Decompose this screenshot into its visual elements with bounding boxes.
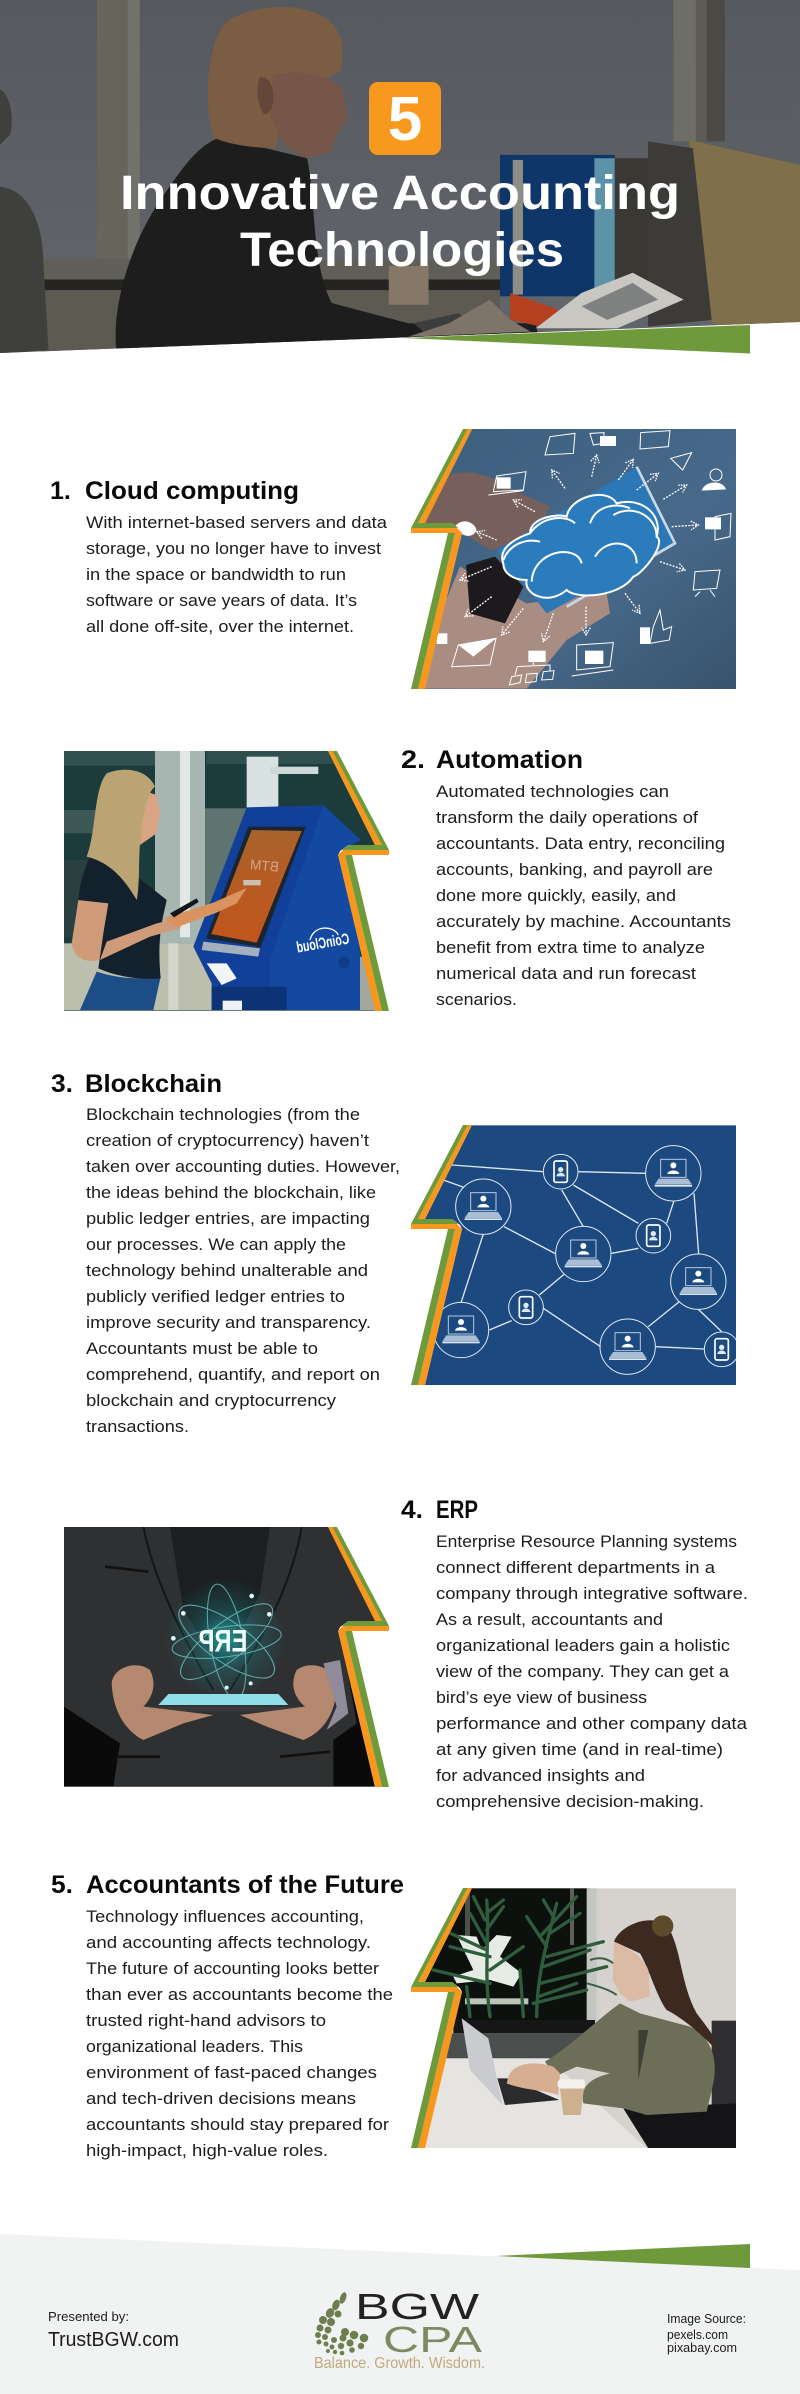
section 5: accountants of the future text: Technology influences accounting,: [86, 1907, 364, 1926]
section 2: automation text: Automated technologies can: [436, 782, 669, 801]
badge: number 5: [369, 82, 441, 155]
section 4 image: hands holding tablet with ERP hologram: [64, 1527, 391, 1787]
logo: BGW CPA: BGW: [355, 2286, 479, 2327]
section 4: ERP text: As a result, accountants and: [436, 1610, 663, 1629]
image source: pixabay.com: [667, 2340, 737, 2355]
image source: pexels.com: [667, 2327, 728, 2342]
badge: number 5: 5: [388, 85, 422, 154]
section 5: accountants of the future text: organizational leaders. This: [86, 2037, 303, 2056]
window light patches: [453, 1935, 522, 1987]
section 4: ERP text: at any given time (and in real-time): [436, 1740, 723, 1759]
section 4: ERP text: performance and other company data: [436, 1714, 748, 1733]
section 4: ERP text: for advanced insights and: [436, 1766, 645, 1785]
section 3: blockchain text: taken over accounting duties. However,: [86, 1157, 400, 1176]
accent frame image 5: [411, 1888, 472, 2148]
section 1 image: hands holding cloud phone: [410, 429, 737, 689]
woman body: [116, 137, 538, 350]
title: [120, 167, 680, 277]
hair: [614, 1920, 718, 2052]
section 1: cloud computing text: software or save years of data. It’s: [86, 591, 357, 610]
chair: [712, 2020, 736, 2104]
footer green wedge: [496, 2244, 750, 2268]
section 3: blockchain text: improve security and transparency.: [86, 1313, 371, 1332]
section 5: accountants of the future text: trusted right-hand advisors to: [86, 2011, 326, 2030]
desk items: [510, 293, 559, 327]
section 1: cloud computing text: [50, 477, 388, 636]
section 3: blockchain text: publicly verified ledger entries to: [86, 1287, 345, 1306]
footer panel: [0, 2234, 800, 2394]
section 3: blockchain text: the ideas behind the blockchain, like: [86, 1183, 376, 1202]
planter: [453, 2020, 595, 2033]
section 1: cloud computing text: 1.: [50, 477, 71, 505]
section 1: cloud computing text: Cloud computing: [85, 477, 299, 505]
window frame right: [673, 0, 696, 141]
section 2: automation text: Automation: [436, 746, 583, 774]
coffee cup: [560, 2088, 584, 2115]
plants: [433, 1897, 607, 2017]
section 4: ERP text: bird’s eye view of business: [436, 1688, 647, 1707]
blue binders: [500, 155, 615, 296]
section 5: accountants of the future text: [51, 1871, 404, 2160]
section 3: blockchain text: public ledger entries, are impacting: [86, 1209, 370, 1228]
laptop: [462, 2018, 503, 2105]
kiosk: [193, 805, 361, 1010]
section 3: blockchain text: technology behind unalterable and: [86, 1261, 368, 1280]
section 3: blockchain text: Blockchain technologies (from the: [86, 1105, 360, 1124]
section 5: accountants of the future text: Accountants of the Future: [86, 1871, 404, 1899]
section 1: cloud computing text: in the space or bandwidth to run: [86, 565, 346, 584]
section 4: ERP text: 4.: [401, 1496, 423, 1524]
section 4: ERP text: company through integrative software.: [436, 1584, 748, 1603]
table: [423, 2058, 647, 2148]
logo dot swirl: [315, 2291, 368, 2355]
section 2: automation text: accounts, banking, and payroll are: [436, 860, 713, 879]
image source: [667, 2311, 746, 2355]
section 5: accountants of the future text: and tech-driven decisions means: [86, 2089, 356, 2108]
section 5: accountants of the future text: The future of accounting looks better: [86, 1959, 379, 1978]
section 3: blockchain text: creation of cryptocurrency) haven’t: [86, 1131, 369, 1150]
face: [613, 1942, 650, 2002]
section 5: accountants of the future text: high-impact, high-value roles.: [86, 2141, 328, 2160]
section 3: blockchain text: our processes. We can apply the: [86, 1235, 346, 1254]
section 2: automation text: done more quickly, easily, and: [436, 886, 676, 905]
dark lower clothing: [623, 2103, 737, 2148]
lower wall: [41, 259, 500, 280]
title: Innovative Accounting: [120, 167, 680, 220]
logo: BGW CPA: Balance. Growth. Wisdom.: [314, 2355, 485, 2372]
section 4: ERP text: [401, 1496, 748, 1811]
section 1: cloud computing text: With internet-based servers and data: [86, 513, 388, 532]
office chair: [0, 187, 48, 354]
accent frame image 1: [411, 429, 472, 689]
section 2 image: woman at BTM kiosk: CoinCloud: [295, 931, 351, 957]
section 2 image: woman at BTM kiosk: [64, 751, 392, 1011]
section 3 image: network diagram: [410, 1125, 739, 1385]
section 4: ERP text: view of the company. They can get a: [436, 1662, 730, 1681]
hands: [507, 2063, 560, 2095]
section 3: blockchain text: comprehend, quantify, and report on: [86, 1365, 380, 1384]
presented by: Presented by:: [48, 2309, 129, 2324]
section 5: accountants of the future text: and accounting affects technology.: [86, 1933, 371, 1952]
accent frame image 4: [328, 1527, 389, 1787]
section 4 image: hands holding tablet with ERP hologram: ERP: [199, 1623, 247, 1659]
section 5 image: woman working on laptop: [410, 1888, 737, 2149]
section 3: blockchain text: Blockchain: [85, 1070, 222, 1098]
section 5: accountants of the future text: 5.: [51, 1871, 73, 1899]
section 2: automation text: [401, 746, 731, 1009]
section 2: automation text: accountants. Data entry, reconciling: [436, 834, 725, 853]
accent frame image 2: [328, 751, 389, 1011]
section 3: blockchain text: [51, 1070, 400, 1436]
accent frame image 3: [411, 1125, 472, 1385]
section 2: automation text: scenarios.: [436, 990, 517, 1009]
section 5: accountants of the future text: accountants should stay prepared for: [86, 2115, 389, 2134]
image source: Image Source:: [667, 2311, 746, 2326]
section 4: ERP text: comprehensive decision-making.: [436, 1792, 704, 1811]
section 3: blockchain text: transactions.: [86, 1417, 189, 1436]
title: Technologies: [240, 224, 564, 277]
presented by: [48, 2309, 179, 2351]
section 4: ERP text: connect different departments in a: [436, 1558, 716, 1577]
woman: [80, 972, 161, 1010]
section 2 image: woman at BTM kiosk: BTM: [250, 856, 279, 875]
section 2: automation text: benefit from extra time to analyze: [436, 938, 705, 957]
section 4: ERP text: Enterprise Resource Planning systems: [436, 1532, 737, 1551]
hair back: [208, 7, 343, 148]
hero bottom green wedge: [403, 325, 750, 354]
section 2: automation text: numerical data and run forecast: [436, 964, 696, 983]
cup: [389, 266, 429, 305]
jacket: [545, 2003, 715, 2115]
section 5: accountants of the future text: environment of fast-paced changes: [86, 2063, 377, 2082]
logo: BGW CPA: [314, 2286, 485, 2372]
section 1: cloud computing text: all done off-site, over the internet.: [86, 617, 354, 636]
section 4: ERP text: organizational leaders gain a holistic: [436, 1636, 731, 1655]
section 5: accountants of the future text: than ever as accountants become the: [86, 1985, 393, 2004]
desk partition: [689, 140, 800, 337]
logo: BGW CPA: CPA: [383, 2319, 482, 2360]
hero banner photo: [0, 0, 800, 360]
section 1: cloud computing text: storage, you no longer have to invest: [86, 539, 381, 558]
face: [278, 79, 347, 158]
section 4: ERP text: ERP: [436, 1496, 478, 1524]
section 3: blockchain text: blockchain and cryptocurrency: [86, 1391, 337, 1410]
section 3: blockchain text: 3.: [51, 1070, 73, 1098]
window frame left: [97, 0, 128, 279]
section 2: automation text: accurately by machine. Accountants: [436, 912, 731, 931]
presented by: TrustBGW.com: [48, 2329, 179, 2351]
section 3: blockchain text: Accountants must be able to: [86, 1339, 318, 1358]
section 2: automation text: transform the daily operations of: [436, 808, 698, 827]
section 2: automation text: 2.: [401, 746, 425, 774]
